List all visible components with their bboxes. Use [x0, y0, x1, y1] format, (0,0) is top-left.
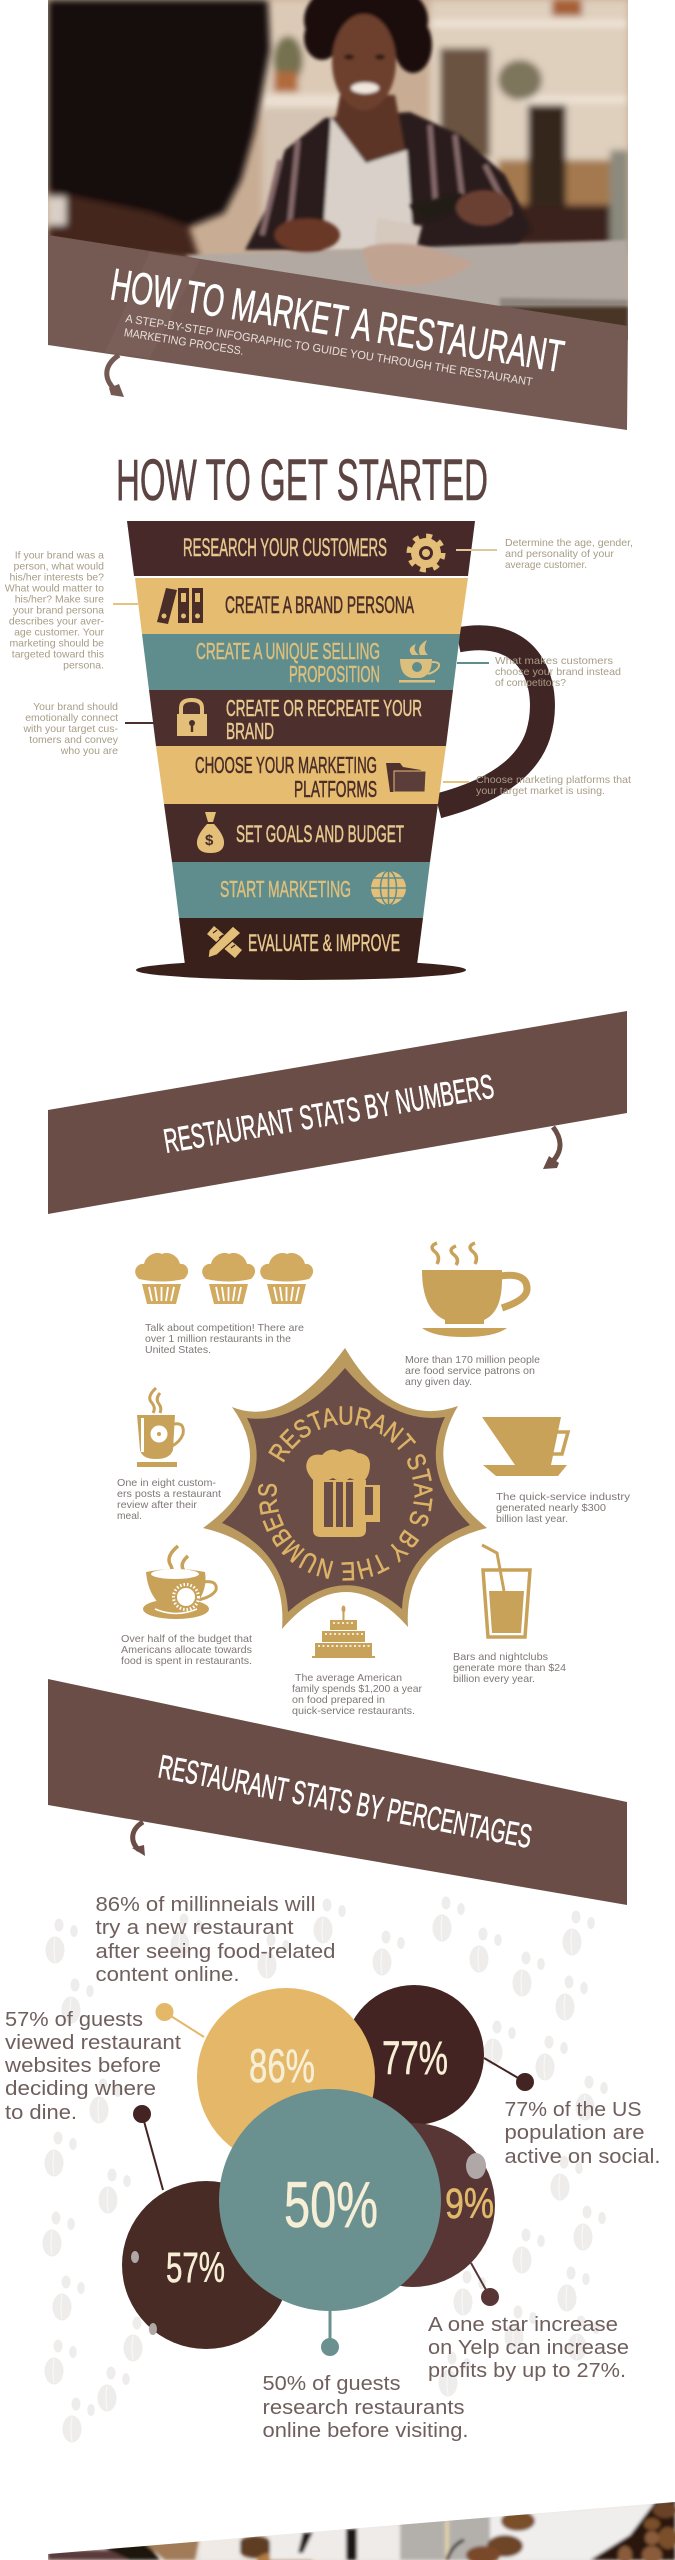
callout: brand emotional connection: who you are	[60, 745, 118, 757]
circle: 57 percent	[122, 2181, 290, 2349]
text: 50 percent research	[262, 2373, 468, 2442]
icon: large coffee cup with steam	[422, 1243, 527, 1337]
step: evaluate and improve: EVALUATE & IMPROVE	[248, 930, 400, 957]
hero photo: cashier taking a card payment	[48, 0, 628, 340]
callout: marketing platforms: Choose marketing platforms that	[476, 774, 631, 786]
connector: 57 percent	[133, 2105, 163, 2190]
icon: binders	[157, 588, 203, 624]
step: create a unique selling proposition: CREATE A UNIQUE SELLING	[196, 638, 380, 664]
text: 86 percent millennials: try a new restaurant	[96, 1917, 294, 1939]
text: one star yelp: on Yelp can increase	[428, 2337, 629, 2359]
text: 86 percent millennials: 86% of millinneials will	[96, 1894, 316, 1916]
callout: brand persona: persona.	[63, 660, 104, 672]
callout: brand emotional connection: Your brand should	[33, 701, 118, 713]
text: 86 percent millennials	[96, 1894, 336, 1986]
text: 77 percent social	[504, 2099, 660, 2168]
callout: marketing platforms: your target market is using.	[476, 785, 605, 797]
callout: brand persona: describes your aver-	[9, 616, 104, 628]
text: 57 percent guests: to dine.	[5, 2102, 77, 2124]
callout: brand emotional connection: emotionally connect	[25, 712, 118, 724]
stat: over 1 million restaurants: over 1 million restaurants in the	[145, 1333, 291, 1345]
step: start marketing: START MARKETING	[220, 876, 351, 902]
stat: quick-service industry: generated nearly $300	[496, 1502, 606, 1514]
connector: 9 percent	[471, 2263, 499, 2306]
stat: half of food budget: Americans allocate towards	[121, 1644, 252, 1656]
callout: brand persona: person, what would	[14, 560, 104, 572]
cup handle	[438, 638, 542, 806]
callout: brand emotional connection	[22, 701, 154, 757]
icon: money bag: $	[205, 832, 214, 849]
connector: 50 percent	[321, 2311, 339, 2356]
text: 86 percent millennials: after seeing food-related	[96, 1941, 336, 1963]
stat: 170 million patrons: are food service patrons on	[405, 1365, 535, 1377]
banner: restaurant stats by percentages	[48, 1679, 627, 1905]
text: 50 percent research: online before visiting.	[262, 2420, 468, 2442]
stat: over 1 million restaurants: United States.	[145, 1344, 211, 1356]
stat: half of food budget	[121, 1546, 252, 1667]
step: start marketing	[172, 862, 430, 918]
text: 50 percent research: research restaurants	[262, 2397, 464, 2419]
text: 77 percent social: active on social.	[504, 2146, 660, 2168]
callout: brand persona: his/her interests be?	[9, 572, 104, 584]
stat: half of food budget: Over half of the budget that	[121, 1633, 252, 1645]
stat: average American family: The average American	[295, 1672, 402, 1684]
callout: brand persona: marketing should be	[9, 638, 104, 650]
icon: crossed pencil and ruler	[207, 926, 242, 958]
text: 57 percent guests: viewed restaurant	[5, 2032, 181, 2054]
icon: money bag	[197, 812, 224, 853]
stat: one in eight customers	[117, 1388, 221, 1522]
chart: coffee cup funnel	[127, 521, 542, 980]
text: one star yelp: profits by up to 27%.	[428, 2360, 626, 2382]
stat: average American family: on food prepared in	[292, 1694, 385, 1706]
step: set goals and budget	[164, 804, 438, 862]
banner: restaurant stats by numbers	[48, 1011, 627, 1214]
text: 77 percent social: population are	[504, 2122, 644, 2144]
text: one star yelp	[428, 2314, 629, 2382]
callout: unique selling proposition	[457, 655, 621, 689]
stat: average American family: quick-service restaurants.	[292, 1705, 415, 1717]
stat: bars and nightclubs: billion every year.	[453, 1673, 535, 1685]
step: create a unique selling proposition	[142, 634, 460, 690]
stat: average American family	[292, 1606, 422, 1717]
text: 57 percent guests: deciding where	[5, 2078, 156, 2100]
text: 77 percent social: 77% of the US	[504, 2099, 642, 2121]
callout: research customers	[456, 537, 633, 571]
step: set goals and budget: SET GOALS AND BUDGET	[236, 821, 404, 848]
subtitle: MARKETING PROCESS.	[123, 327, 244, 358]
callout: brand persona: his/her? Make sure	[15, 594, 104, 606]
text: 57 percent guests: 57% of guests	[5, 2009, 143, 2031]
icon: three muffins	[135, 1253, 313, 1304]
circle: 50 percent: 50%	[284, 2168, 378, 2241]
stat: one in eight customers: meal.	[117, 1510, 142, 1522]
icon: folder	[386, 763, 426, 792]
callout: brand emotional connection: tomers and convey	[29, 734, 119, 746]
callout: unique selling proposition: What makes customers	[495, 655, 613, 667]
text: 86 percent millennials: content online.	[96, 1964, 240, 1986]
circle: 86 percent	[197, 1988, 375, 2166]
step: research your customers	[127, 521, 475, 576]
stat: average American family: family spends $1,200 a year	[292, 1683, 422, 1695]
saucer	[136, 960, 466, 980]
step: choose your marketing platforms	[156, 746, 446, 804]
step: choose your marketing platforms: CHOOSE YOUR MARKETING	[195, 752, 377, 778]
chart: overlapping percentage circles	[122, 1985, 534, 2356]
stat: one in eight customers: review after their	[117, 1499, 198, 1511]
step: evaluate and improve	[179, 918, 423, 965]
callout: brand persona: If your brand was a	[15, 550, 104, 562]
stat: quick-service industry: The quick-service industry	[496, 1491, 631, 1503]
callout: brand persona: age customer. Your	[14, 626, 104, 638]
banner: main title	[48, 235, 628, 430]
stat: quick-service industry: billion last year.	[496, 1513, 568, 1525]
stat: over 1 million restaurants	[135, 1253, 313, 1356]
text: 50 percent research: 50% of guests	[262, 2373, 400, 2395]
icon: globe	[371, 871, 406, 905]
step: create a brand persona	[135, 578, 468, 634]
arrow: percentages banner	[132, 1822, 145, 1856]
subtitle: A STEP-BY-STEP INFOGRAPHIC TO GUIDE YOU THROUGH THE RESTAURANT	[125, 313, 533, 389]
arrow: numbers banner	[543, 1127, 560, 1169]
callout: brand persona: What would matter to	[5, 582, 104, 594]
circle: 9 percent: 9%	[445, 2180, 494, 2228]
icon: padlock	[177, 700, 207, 736]
text: one star yelp: A one star increase	[428, 2314, 618, 2336]
connector: 77 percent	[484, 2058, 534, 2091]
callout: brand persona	[5, 550, 138, 672]
stat: 170 million patrons	[405, 1243, 540, 1388]
arrow: title banner	[107, 355, 124, 397]
icon: glass with straw	[482, 1545, 530, 1637]
stat: bars and nightclubs: Bars and nightclubs	[453, 1651, 548, 1663]
stat: bars and nightclubs: generate more than $24	[453, 1662, 566, 1674]
circular badge text: RESTAURANT STATS BY THE NUMBERS	[258, 1406, 433, 1581]
circle: 77 percent: 77%	[382, 2031, 448, 2084]
circle: 50 percent	[219, 2089, 441, 2311]
stat: half of food budget: food is spent in restaurants.	[121, 1655, 252, 1667]
icon: beer mug	[306, 1449, 380, 1537]
stat: one in eight customers: One in eight custom-	[117, 1477, 217, 1489]
callout: brand emotional connection: with your target cus-	[22, 723, 118, 735]
stat: 170 million patrons: any given day.	[405, 1376, 472, 1388]
stat: quick-service industry	[482, 1417, 631, 1525]
footer photo: coffee cup and beans	[48, 2500, 675, 2560]
circle: 9 percent	[331, 2123, 495, 2287]
step: create or recreate your brand: CREATE OR RECREATE YOUR	[226, 695, 422, 721]
circle: 57 percent: 57%	[166, 2244, 225, 2292]
text: 57 percent guests: websites before	[4, 2055, 161, 2077]
icon: coffee cup with sun	[143, 1546, 216, 1619]
stat: one in eight customers: ers posts a restaurant	[117, 1488, 221, 1500]
step: create or recreate your brand: BRAND	[226, 718, 274, 744]
stat: 170 million patrons: More than 170 million people	[405, 1354, 540, 1366]
connector: 86 percent	[156, 2003, 204, 2037]
callout: brand persona: your brand persona	[13, 604, 104, 616]
icon: gear	[409, 536, 443, 570]
icon: coffee cup with steam	[399, 640, 439, 682]
callout: research customers: Determine the age, gender,	[505, 537, 633, 549]
circle: 77 percent	[344, 1985, 484, 2125]
step: choose your marketing platforms: PLATFORMS	[294, 776, 377, 802]
callout: marketing platforms	[443, 774, 631, 797]
step: create a unique selling proposition: PROPOSITION	[289, 661, 380, 687]
icon: tiered cake	[312, 1606, 375, 1658]
stat: bars and nightclubs	[453, 1545, 566, 1685]
icon: mug with steam and flower	[137, 1388, 183, 1467]
callout: brand persona: targeted toward this	[12, 648, 104, 660]
step: create or recreate your brand	[149, 690, 453, 746]
step: create a brand persona: CREATE A BRAND PERSONA	[225, 592, 414, 619]
text: 57 percent guests	[4, 2009, 181, 2124]
callout: research customers: average customer.	[505, 559, 587, 571]
callout: unique selling proposition: of competitors?	[495, 677, 566, 689]
background: coffee bean pattern	[42, 1896, 608, 2442]
step: research your customers: RESEARCH YOUR CUSTOMERS	[183, 534, 387, 562]
stat: over 1 million restaurants: Talk about competition! There are	[145, 1322, 304, 1334]
circle: 86 percent: 86%	[249, 2039, 315, 2092]
callout: research customers: and personality of your	[505, 548, 615, 560]
callout: unique selling proposition: choose your brand instead	[495, 666, 621, 678]
badge: restaurant stats by the numbers	[203, 1348, 487, 1629]
icon: conical coffee cup	[482, 1417, 568, 1476]
